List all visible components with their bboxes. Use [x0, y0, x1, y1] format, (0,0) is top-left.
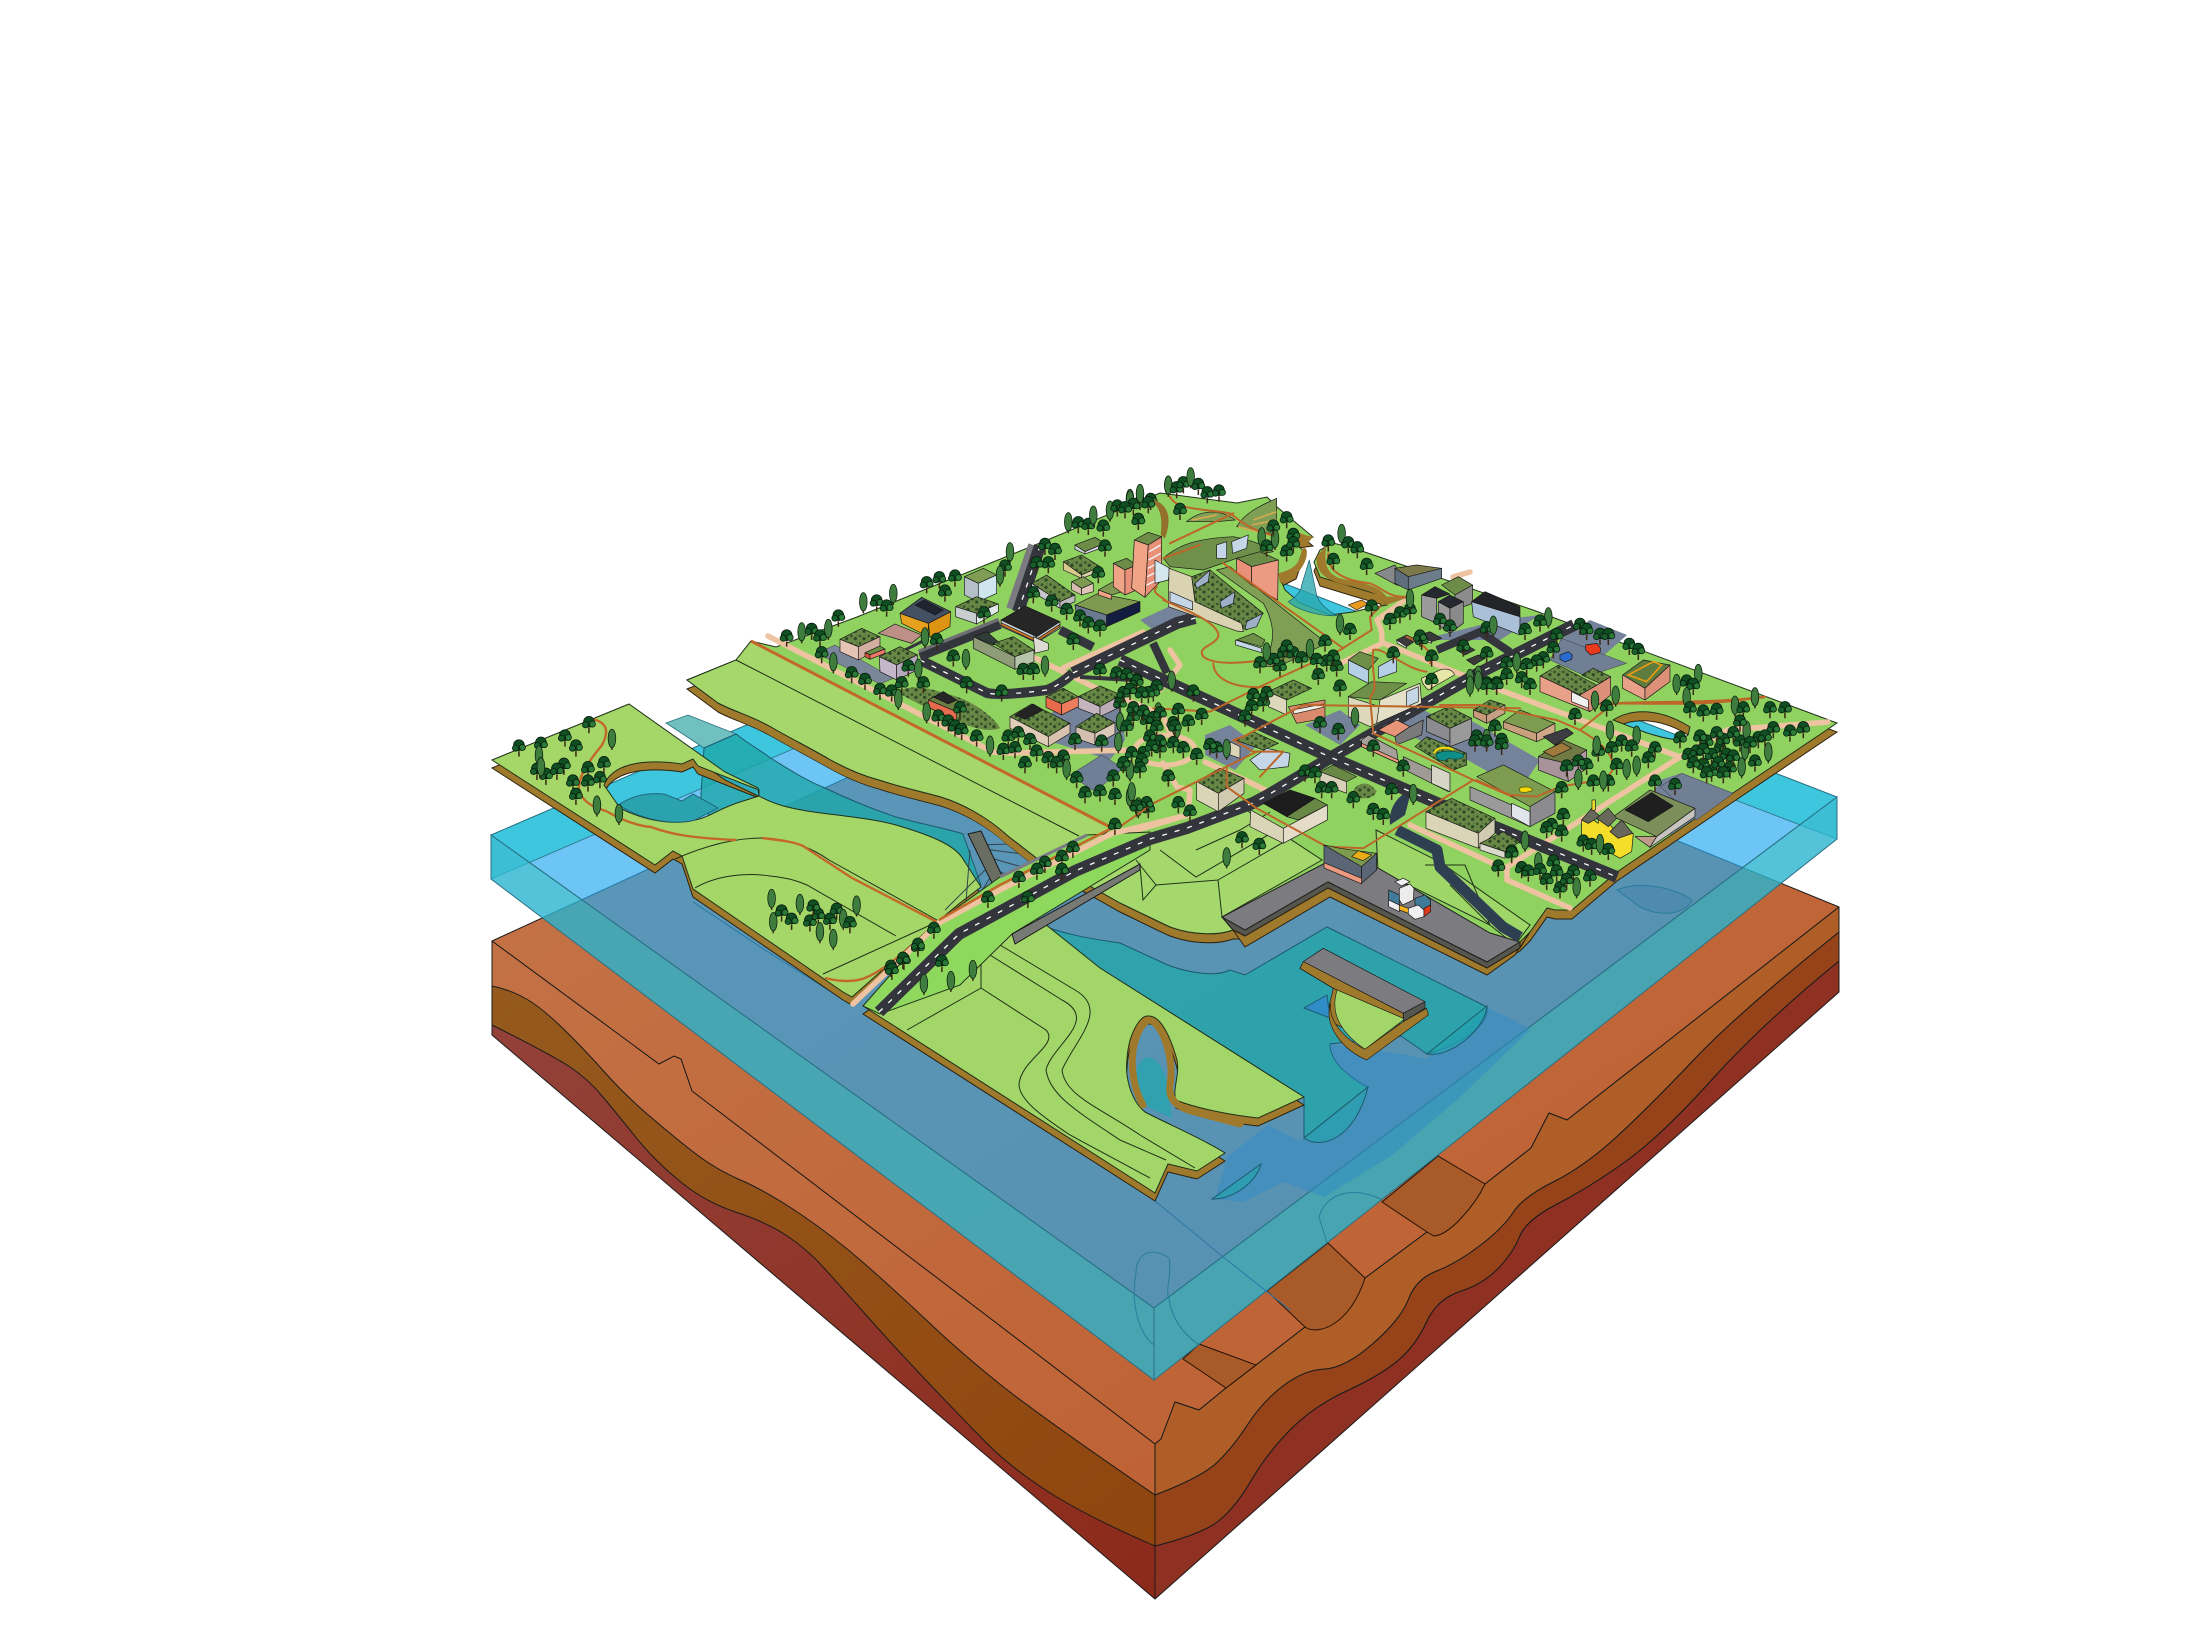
building: red striped block [928, 692, 962, 721]
brown bank right of hollow [1316, 545, 1410, 605]
building: beige corner box [1197, 768, 1244, 812]
water front-right face [1154, 797, 1837, 1380]
bridge orange path [939, 828, 1112, 920]
water back-left face [491, 541, 1174, 879]
orange skywalks and paths [1120, 497, 1520, 848]
earth top and left orange face [492, 631, 1839, 1495]
quay brown foundation [1233, 888, 1530, 975]
building: small red annex [865, 646, 885, 659]
quay surface [1222, 862, 1520, 962]
panel: south meadow plate [863, 905, 1304, 1201]
building: green apartment [973, 632, 1034, 669]
building: grey garage [1470, 765, 1555, 827]
front terrace slopes [1136, 812, 1322, 917]
panel: harbour buildings [1223, 831, 1518, 1060]
building: pink with green roof [840, 628, 880, 660]
river channel teal [700, 734, 981, 900]
building: silo left [1422, 587, 1450, 623]
dark tunnel hall [1543, 728, 1573, 745]
orange coil on roof [1628, 662, 1662, 682]
east terrace [1376, 830, 1530, 945]
building: brick tower [1237, 552, 1278, 600]
earth right red stratum [1155, 961, 1839, 1599]
building: olive roof with solar [1613, 790, 1695, 847]
panel: earth block [492, 631, 1839, 1599]
earth left red stratum [492, 1000, 1155, 1599]
building: grey and pink lab [1362, 735, 1398, 763]
building: lilac roof garden [1078, 686, 1121, 717]
building: salmon low wing [1098, 582, 1128, 599]
meadow underside [863, 913, 1304, 1201]
building: long grey wall [1403, 757, 1450, 792]
building: beige long hedge [1426, 798, 1495, 848]
dark hedge mound [1352, 783, 1377, 798]
roof garden with yellow arc and pond [1415, 737, 1467, 770]
trees: west quarter [780, 476, 1180, 818]
building: salmon clinic [1046, 688, 1078, 715]
building: large salmon store [1540, 665, 1611, 712]
water channel through city [1397, 830, 1520, 937]
building: stepped beige complex [1168, 568, 1263, 632]
panel: city quarter west [780, 476, 1180, 818]
pier island brown [1329, 1003, 1428, 1060]
yellow arc [1434, 748, 1453, 753]
water back-right face [1174, 541, 1837, 839]
east small pier [1300, 968, 1427, 1033]
building: solar roof pavilion [1001, 606, 1060, 643]
building: silo right [1438, 595, 1463, 633]
trees: east quarter [1466, 608, 1810, 898]
east terrace lines [1425, 865, 1490, 925]
trees on terrace [1223, 831, 1518, 877]
dark green ridge [1163, 537, 1273, 570]
pond rim west of right hole grass [1600, 697, 1765, 705]
small houses [1397, 632, 1485, 665]
building: glass tower [964, 568, 997, 602]
channel arch [1390, 788, 1412, 825]
building: lilac courtyard [1538, 740, 1587, 782]
building: long green-roof block [1032, 575, 1075, 608]
upper hill ochre terraces [1187, 512, 1235, 522]
building: tan roof garden [1076, 713, 1115, 745]
building: glass annex behind tower [1155, 560, 1170, 583]
building: grey hedge roof [1427, 707, 1472, 747]
building: low lab [956, 597, 998, 624]
building: small glass wing [1236, 633, 1265, 653]
plaza: slate pond paving [1070, 755, 1123, 792]
panel: city quarter centre north [1116, 468, 1520, 858]
building: hedge-top beige [1268, 680, 1312, 715]
panel: groundwater layer [491, 541, 1837, 1380]
teal pond [1436, 751, 1464, 760]
building: salmon stepped [1288, 700, 1325, 723]
city plate surface [687, 493, 1837, 962]
building: glass hill windows [1217, 535, 1248, 558]
city plate underside [687, 502, 1837, 971]
big green slope [1217, 567, 1327, 667]
plaza: pink [878, 624, 922, 643]
quay side [1222, 882, 1520, 968]
meadow surface [863, 905, 1304, 1193]
embankment orange path [751, 641, 1112, 828]
earth right orange face [1155, 907, 1839, 1495]
building: small grey annex [1033, 637, 1048, 653]
upper hill dark crest [1237, 498, 1277, 533]
containers [1389, 878, 1431, 919]
pavements [768, 572, 1828, 908]
building: small pink block [1072, 577, 1093, 595]
floodplain orange paths [579, 719, 937, 981]
panel: city quarter east [1440, 608, 1810, 898]
pond teal inside floodplain [620, 794, 718, 822]
building: navy block [1075, 593, 1140, 627]
building: steel factory [1472, 592, 1520, 635]
meadow bay brown rim [1132, 1020, 1240, 1124]
building: tan small [1473, 700, 1505, 723]
pier island green [1335, 987, 1403, 1049]
roads [853, 546, 1617, 1012]
building: salmon high tower [1132, 532, 1162, 597]
lower bridge girder [1012, 864, 1140, 944]
upper bridge girder [1000, 835, 1087, 877]
yellow factory walls [1582, 808, 1633, 858]
brown rim of hollow [1278, 528, 1313, 583]
building: low hedge annex [1480, 832, 1520, 858]
trees: floodplain clusters [512, 716, 1121, 995]
factory chimney [1592, 800, 1595, 811]
building: beige small roof [1320, 765, 1357, 793]
floodplain contour lines [675, 838, 937, 920]
building: solar block [1250, 790, 1327, 843]
building: striped flats [1063, 555, 1100, 578]
deep channel blue [1215, 1008, 1530, 1202]
building: back green block [1442, 577, 1473, 610]
panel: city plate [687, 493, 1837, 1014]
water front-left face [491, 835, 1154, 1380]
building: slate depot [1375, 565, 1442, 590]
trees: centre quarter [1116, 468, 1513, 825]
parking paving west [817, 645, 890, 684]
deck base [863, 832, 1150, 1014]
earth right brown stratum [1155, 932, 1839, 1546]
front terrace [1085, 806, 1322, 934]
meadow contour lines [907, 950, 1150, 1178]
building: beige with solar [1010, 704, 1070, 747]
hollow teal fall [1288, 560, 1337, 616]
orange paths [1440, 697, 1765, 797]
building: salmon with orange coil roof [1623, 660, 1670, 700]
yellow blob [1519, 787, 1533, 792]
harbour channel teal [1030, 920, 1487, 1138]
pale teal far river tip [666, 715, 736, 748]
faint submerged outlines [693, 885, 1692, 1345]
building: lilac block [879, 647, 917, 680]
forecourt [817, 645, 893, 684]
meadow bay water [1136, 1058, 1172, 1118]
red crate [1586, 643, 1601, 655]
slate paving by factory [1660, 773, 1733, 820]
water top surface [491, 541, 1837, 1308]
earth strata line on left top [492, 941, 1155, 1444]
north-west embankment [687, 641, 1112, 870]
plaza with crates [1550, 638, 1627, 677]
building: low flats [1075, 537, 1105, 554]
floodplain surface [492, 704, 981, 997]
building: tan hall [1503, 710, 1555, 742]
bridge pylon and cables [945, 831, 1090, 925]
building: orange house with solar roof [900, 597, 951, 637]
building: glass walled court [1348, 652, 1422, 727]
earth left brown stratum [492, 960, 1155, 1546]
harbour office [1324, 845, 1377, 884]
building: terrace stack [1230, 732, 1290, 770]
upper hill brown stream [1148, 498, 1169, 538]
small orange cabin [1348, 600, 1368, 610]
arched hall [1422, 669, 1454, 690]
embankment line and orange path [736, 660, 1079, 836]
pier deck [1300, 948, 1425, 1022]
building: tile roof [1378, 720, 1423, 745]
arm bank thick brown [722, 710, 1039, 866]
green hill dark vegetation [897, 687, 1000, 730]
earth top surface lobes [1183, 1156, 1485, 1388]
ochre terrace stripes [1192, 512, 1277, 535]
pale grey forecourts [1030, 590, 1733, 835]
panel: west floodplain plate [492, 704, 981, 1005]
building: salmon mid tower [1113, 558, 1137, 595]
blue crate [1560, 652, 1572, 662]
submerged pool lobes [1212, 995, 1487, 1199]
floodplain underside [492, 712, 981, 1005]
